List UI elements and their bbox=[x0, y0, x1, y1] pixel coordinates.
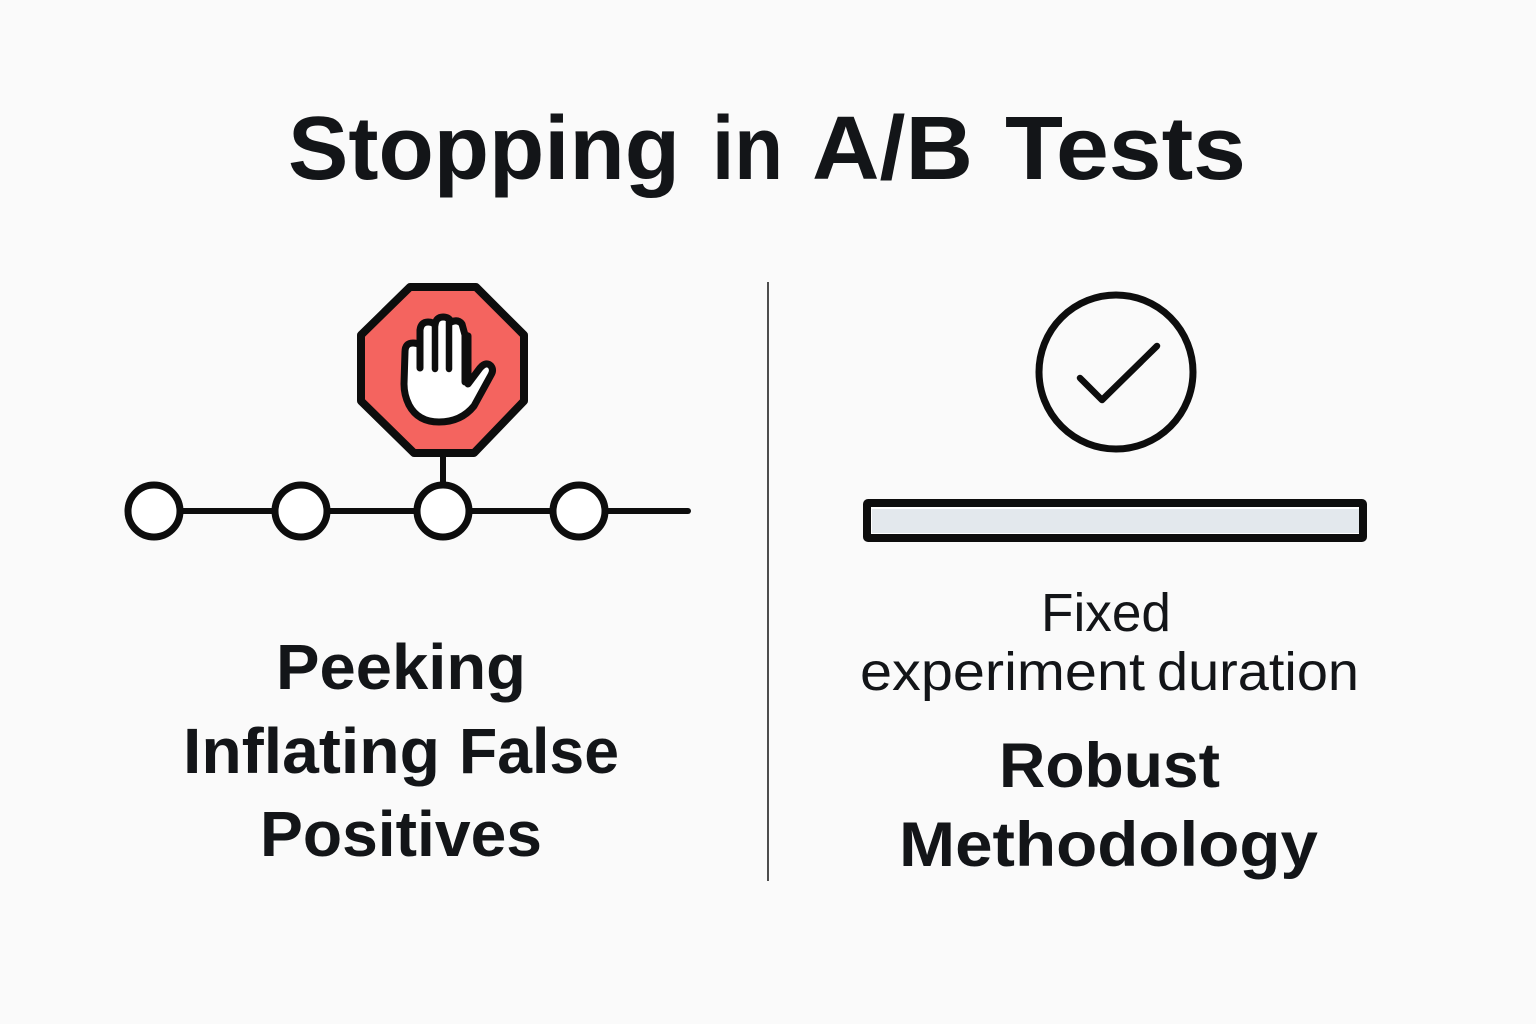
heading: robust methodology: Robust bbox=[999, 731, 1220, 801]
text: fixed experiment duration: duration bbox=[1157, 642, 1359, 702]
timeline with checkpoints bbox=[128, 450, 688, 537]
text: fixed experiment duration bbox=[860, 583, 1359, 702]
heading: peeking inflating false positives: Peeking bbox=[276, 631, 526, 703]
panel: fixed duration (right) bbox=[860, 295, 1363, 880]
title: Stopping bbox=[288, 99, 680, 199]
title: Tests bbox=[1005, 99, 1246, 199]
title: in bbox=[712, 99, 783, 199]
title: A/B bbox=[812, 99, 973, 199]
text: fixed experiment duration: Fixed bbox=[1041, 583, 1171, 643]
duration bar bbox=[867, 503, 1363, 538]
heading: peeking inflating false positives: Inflating bbox=[183, 715, 440, 787]
heading: robust methodology bbox=[899, 731, 1318, 880]
text: fixed experiment duration: experiment bbox=[860, 642, 1145, 702]
icon: red stop sign with hand bbox=[361, 287, 524, 453]
panel: peeking (left) bbox=[128, 287, 688, 870]
icon: check mark in circle bbox=[1039, 295, 1193, 449]
heading: robust methodology: Methodology bbox=[899, 810, 1318, 880]
heading: peeking inflating false positives bbox=[183, 631, 619, 870]
title bbox=[288, 99, 1246, 199]
heading: peeking inflating false positives: Positives bbox=[260, 798, 542, 870]
heading: peeking inflating false positives: False bbox=[459, 715, 619, 787]
